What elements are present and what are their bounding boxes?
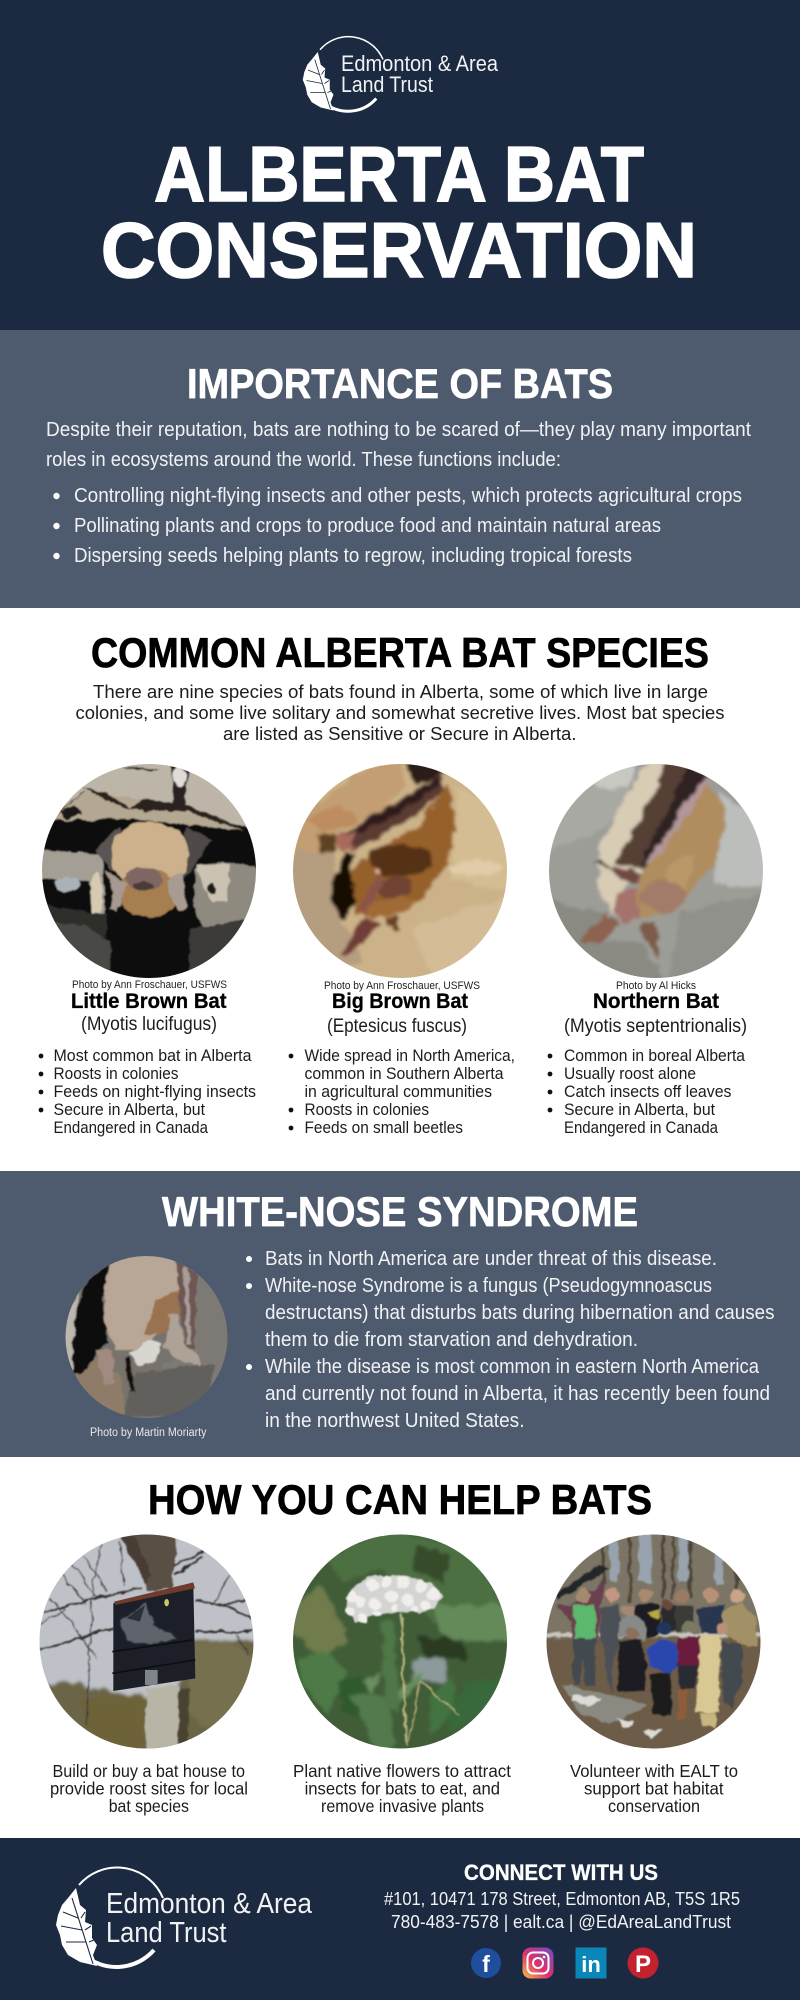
photo credit: Photo by Martin Moriarty [90, 1427, 207, 1439]
caption [50, 1761, 248, 1816]
heading: common alberta bat species: COMMON ALBERTA BAT SPECIES [91, 629, 709, 676]
facts list: Secure in Alberta, but [564, 1100, 715, 1119]
facts list: Common in boreal Alberta [564, 1046, 746, 1065]
icon: facebook: f [482, 1951, 490, 1977]
caption: Volunteer with EALT to [570, 1761, 738, 1781]
bullet list: bat functions: Pollinating plants and crops to produce food and maintain natural areas [74, 514, 661, 537]
species intro paragraph: colonies, and some live solitary and somewhat secretive lives. Most bat species [76, 702, 724, 723]
logo: Edmonton & Area Land Trust: Land Trust [341, 72, 433, 97]
facts list [289, 1046, 515, 1137]
photo: bat house on a tree [40, 1534, 254, 1748]
bullet list: white-nose facts: in the northwest United States. [265, 1410, 524, 1432]
contact details: #101, 10471 178 Street, Edmonton AB, T5S 1R5 [384, 1888, 740, 1909]
contact details [384, 1888, 740, 1932]
panel: footer [0, 1838, 800, 2000]
scientific name: (Eptesicus fuscus) [327, 1015, 467, 1037]
contact details: 780-483-7578 | ealt.ca | @EdAreaLandTrust [391, 1911, 731, 1932]
panel: header [0, 0, 800, 330]
help card: native flowers [293, 1534, 511, 1816]
species name: Northern Bat [593, 990, 719, 1013]
photo: white yarrow flower [293, 1534, 507, 1748]
help card: bat house [40, 1534, 254, 1816]
photo credit: Photo by Ann Froschauer, USFWS [324, 980, 480, 992]
species intro paragraph: There are nine species of bats found in Alberta, some of which live in large [93, 681, 708, 702]
caption: conservation [608, 1796, 700, 1816]
photo: big brown bat [293, 764, 507, 978]
species card: little brown bat [38, 764, 256, 1136]
panel: common alberta bat species [38, 638, 763, 1136]
facts list [39, 1046, 256, 1137]
caption: support bat habitat [584, 1778, 724, 1798]
species card: big brown bat [288, 764, 514, 1133]
intro paragraph: Despite their reputation, bats are nothing to be scared of—they play many important [46, 418, 751, 441]
caption: Build or buy a bat house to [52, 1761, 245, 1781]
facts list: Catch insects off leaves [564, 1082, 732, 1101]
species name: Big Brown Bat [332, 990, 468, 1013]
photo: little brown bat [42, 764, 256, 978]
caption: bat species [109, 1796, 189, 1816]
intro paragraph: roles in ecosystems around the world. These functions include: [46, 448, 561, 471]
facts list: Secure in Alberta, but [54, 1100, 205, 1119]
icon: linkedin [576, 1948, 606, 1978]
scientific name: (Myotis septentrionalis) [564, 1015, 747, 1037]
photo: bat with white-nose syndrome [66, 1256, 228, 1418]
icon: facebook [471, 1948, 501, 1978]
caption: provide roost sites for local [50, 1778, 248, 1798]
icon: pinterest [628, 1948, 658, 1978]
intro paragraph [46, 418, 751, 471]
bullet list: bat functions [53, 484, 742, 567]
panel: importance of bats [0, 330, 800, 608]
help card: volunteer [546, 1534, 760, 1812]
facts list: Most common bat in Alberta [54, 1046, 252, 1065]
facts list [548, 1046, 746, 1137]
caption [570, 1761, 738, 1816]
logo: Edmonton & Area Land Trust [56, 1868, 313, 1967]
facts list: Roosts in colonies [304, 1100, 429, 1119]
facts list: Usually roost alone [564, 1064, 696, 1083]
heading: white-nose syndrome: WHITE-NOSE SYNDROME [162, 1188, 638, 1235]
heading: connect with us: CONNECT WITH US [464, 1860, 658, 1885]
facts list: in agricultural communities [304, 1082, 492, 1101]
caption: remove invasive plants [321, 1796, 484, 1816]
scientific name: (Myotis lucifugus) [81, 1013, 217, 1035]
facts list: Feeds on night-flying insects [54, 1082, 256, 1101]
species card: northern bat [548, 764, 763, 1136]
icon: pinterest: P [635, 1951, 651, 1978]
species intro paragraph: are listed as Sensitive or Secure in Alberta. [223, 723, 576, 744]
facts list: common in Southern Alberta [304, 1064, 504, 1083]
logo: Edmonton & Area Land Trust: Edmonton & Area [341, 51, 499, 76]
photo credit: Photo by Ann Froschauer, USFWS [72, 979, 227, 991]
bullet list: white-nose facts: and currently not found in Alberta, it has recently been found [265, 1383, 770, 1405]
icon: linkedin: in [581, 1952, 601, 1977]
heading: importance of bats: IMPORTANCE OF BATS [187, 360, 613, 407]
bullet list: white-nose facts [246, 1248, 774, 1432]
title: CONSERVATION [101, 206, 697, 294]
panel: white-nose syndrome [0, 1171, 800, 1457]
logo: Edmonton & Area Land Trust: Land Trust [106, 1917, 226, 1949]
photo: northern bat [549, 764, 763, 978]
bullet list: bat functions: Dispersing seeds helping plants to regrow, including tropical forests [74, 544, 632, 567]
heading: how you can help bats: HOW YOU CAN HELP BATS [148, 1476, 652, 1523]
bullet list: white-nose facts: Bats in North America are under threat of this disease. [265, 1248, 717, 1270]
caption [293, 1761, 511, 1816]
species intro paragraph [76, 681, 724, 744]
panel: how you can help bats [40, 1484, 760, 1816]
facts list: Wide spread in North America, [304, 1046, 515, 1065]
bullet list: white-nose facts: While the disease is most common in eastern North America [265, 1356, 760, 1378]
bullet list: bat functions: Controlling night-flying insects and other pests, which protects agricultural crops [74, 484, 742, 507]
facts list: Roosts in colonies [54, 1064, 178, 1083]
caption: insects for bats to eat, and [305, 1778, 500, 1798]
facts list: Endangered in Canada [564, 1118, 718, 1137]
title: ALBERTA BAT [154, 130, 644, 218]
facts list: Endangered in Canada [54, 1118, 208, 1137]
species name: Little Brown Bat [71, 990, 227, 1013]
caption: Plant native flowers to attract [293, 1761, 511, 1781]
icon: instagram [522, 1948, 554, 1978]
logo: Edmonton & Area Land Trust: Edmonton & Area [106, 1888, 313, 1920]
bullet list: white-nose facts: White-nose Syndrome is a fungus (Pseudogymnoascus [265, 1275, 712, 1297]
bullet list: white-nose facts: them to die from starvation and dehydration. [265, 1329, 638, 1351]
photo: volunteer group with bat house [546, 1534, 760, 1748]
title [101, 130, 697, 294]
bullet list: white-nose facts: destructans) that disturbs bats during hibernation and causes [265, 1302, 774, 1324]
facts list: Feeds on small beetles [304, 1118, 463, 1137]
logo: Edmonton & Area Land Trust [303, 37, 499, 111]
photo credit: Photo by Al Hicks [616, 980, 696, 992]
